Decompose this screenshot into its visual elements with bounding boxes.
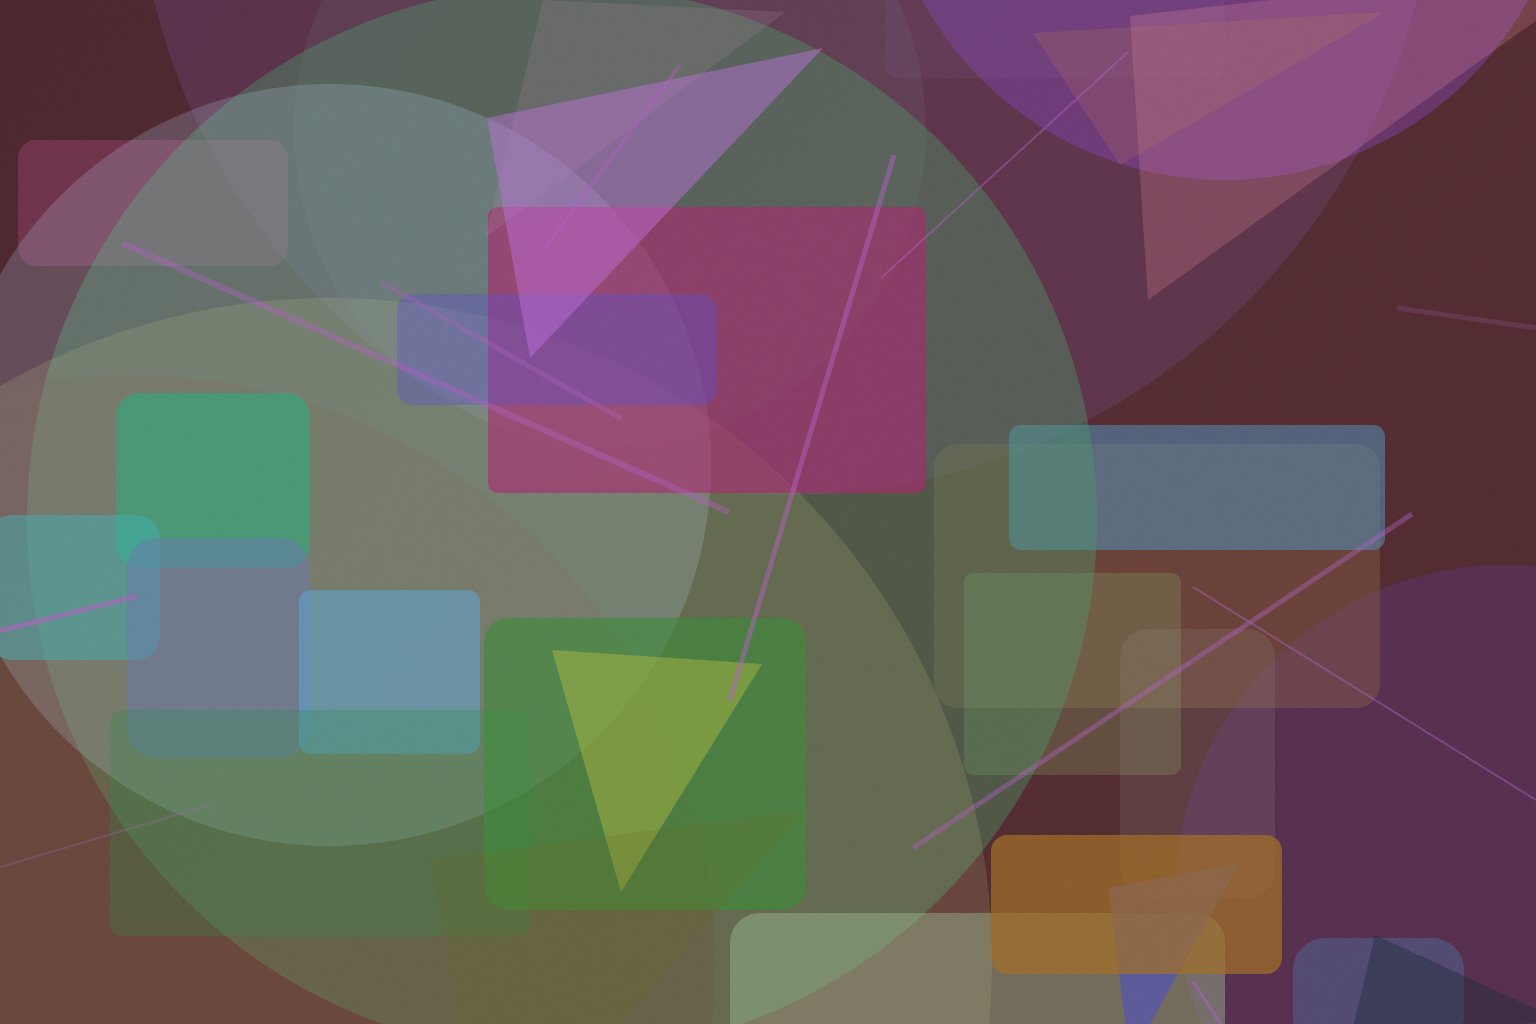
- circle: brown tint lower left: [0, 375, 715, 1024]
- line: bottom short: [1193, 982, 1225, 1024]
- line: lower left thin: [0, 805, 210, 867]
- line: centre steep: [730, 155, 894, 700]
- rectangle: rose top left: [18, 140, 288, 266]
- rectangle: tan right: [934, 444, 1380, 708]
- line: lower right long: [913, 514, 1412, 848]
- circle: large green: [27, 0, 1097, 1024]
- triangle: rose top right: [1033, 12, 1385, 165]
- lower rectangles group: [18, 0, 1385, 898]
- line: upper right thin: [881, 52, 1128, 278]
- circle: upper middle: [294, 0, 926, 446]
- triangles group: [430, 0, 1536, 1024]
- rectangle: olive right: [964, 573, 1181, 775]
- circle: lower right purple: [1175, 565, 1536, 1024]
- triangle: dark bottom right: [1350, 935, 1536, 1024]
- rectangle: dark green wide: [110, 710, 530, 936]
- rectangle: orange: [991, 835, 1282, 974]
- triangle: light purple: [487, 48, 823, 358]
- rectangle: green centre: [484, 618, 806, 910]
- circle: top right violet: [880, 0, 1536, 180]
- rectangle: slate blue: [127, 538, 310, 758]
- line: long diagonal left: [122, 243, 729, 512]
- triangle: blue bottom: [1108, 863, 1240, 1024]
- rectangle: gray right: [1120, 629, 1275, 898]
- triangle: olive lower: [430, 810, 805, 1024]
- line: left short: [0, 596, 137, 631]
- line: lower right thin: [1193, 587, 1536, 800]
- line: far right: [1397, 308, 1536, 328]
- rectangle: slate bottom right: [1293, 938, 1464, 1024]
- rectangle: pale green bottom: [730, 913, 1225, 1024]
- upper rectangles group: [0, 207, 1464, 1024]
- triangle: gray top: [485, 0, 785, 238]
- rectangle: teal left: [0, 515, 160, 660]
- rectangle: magenta centre: [488, 207, 926, 493]
- circle: yellow green overlay: [0, 298, 992, 1024]
- circle: top dark purple: [135, 0, 1435, 495]
- circle: pale blue: [0, 84, 711, 846]
- line: indigo crossing: [381, 282, 622, 419]
- line: top short: [542, 65, 680, 252]
- rectangle: light blue: [299, 590, 480, 754]
- rectangle: indigo: [397, 294, 717, 405]
- triangle: pale rose top right: [1130, 0, 1536, 300]
- triangle: yellow green: [552, 650, 762, 892]
- rectangle: top faint: [885, 0, 1225, 78]
- rectangle: emerald: [116, 393, 310, 568]
- rectangle: blue right: [1009, 425, 1385, 550]
